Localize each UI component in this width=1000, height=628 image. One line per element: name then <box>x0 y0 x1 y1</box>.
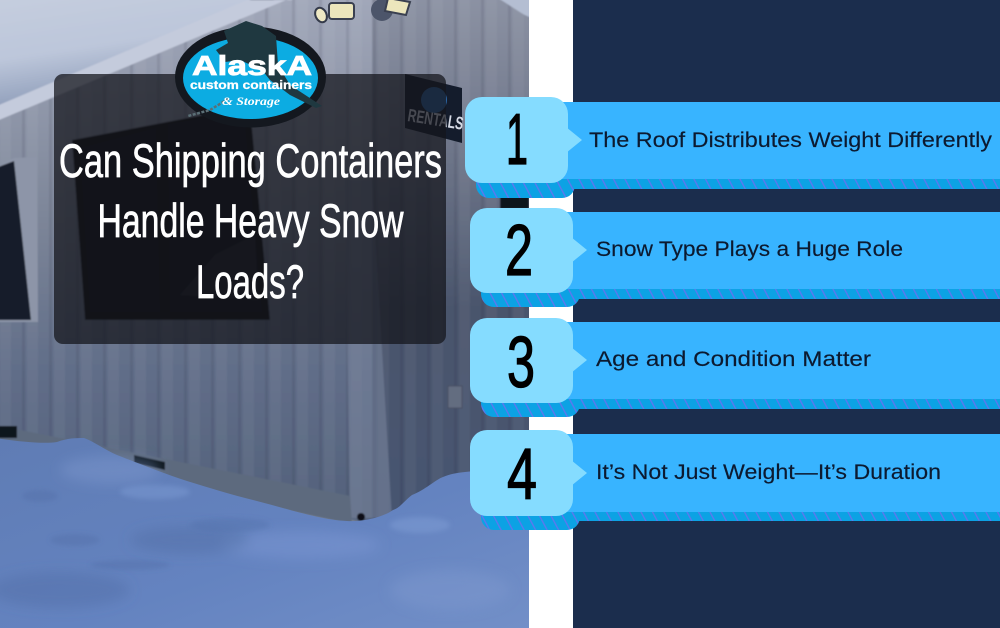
card 3: 3 <box>507 323 535 403</box>
wall base strip <box>0 432 352 521</box>
page background: white strip <box>529 0 573 628</box>
sign: RENTALS <box>406 105 465 134</box>
navy panel <box>573 0 1000 628</box>
logo: oval badge <box>175 26 326 128</box>
logo <box>175 21 326 128</box>
title: Loads? <box>196 255 304 308</box>
main window <box>72 106 270 320</box>
card 4: It’s Not Just Weight—It’s Duration <box>596 461 941 484</box>
card 3: Age and Condition Matter <box>596 348 871 371</box>
card 3 <box>470 318 1000 417</box>
title <box>59 134 442 308</box>
logo: custom containers <box>190 78 312 92</box>
logo: & Storage <box>222 94 281 108</box>
card 4: 4 <box>507 435 537 515</box>
snow <box>0 438 535 628</box>
card 4 <box>470 430 1000 530</box>
logo: Aleutian islands <box>188 99 228 116</box>
logo: wordmark: AlaskA <box>192 50 312 81</box>
card 1: The Roof Distributes Weight Differently <box>589 129 993 152</box>
card 1 <box>465 97 1000 198</box>
lights <box>313 0 410 24</box>
card 2: 2 <box>505 211 533 291</box>
photo: shipping container in snow <box>0 0 540 628</box>
title: Can Shipping Containers <box>59 134 442 187</box>
title: Handle Heavy Snow <box>98 194 404 247</box>
logo: Alaska silhouette <box>216 21 322 108</box>
card 1: 1 <box>506 100 528 180</box>
dark title panel <box>54 74 446 344</box>
left window <box>0 157 38 322</box>
card 2 <box>470 208 1000 307</box>
card 2: Snow Type Plays a Huge Role <box>596 238 903 261</box>
sign <box>405 74 465 143</box>
